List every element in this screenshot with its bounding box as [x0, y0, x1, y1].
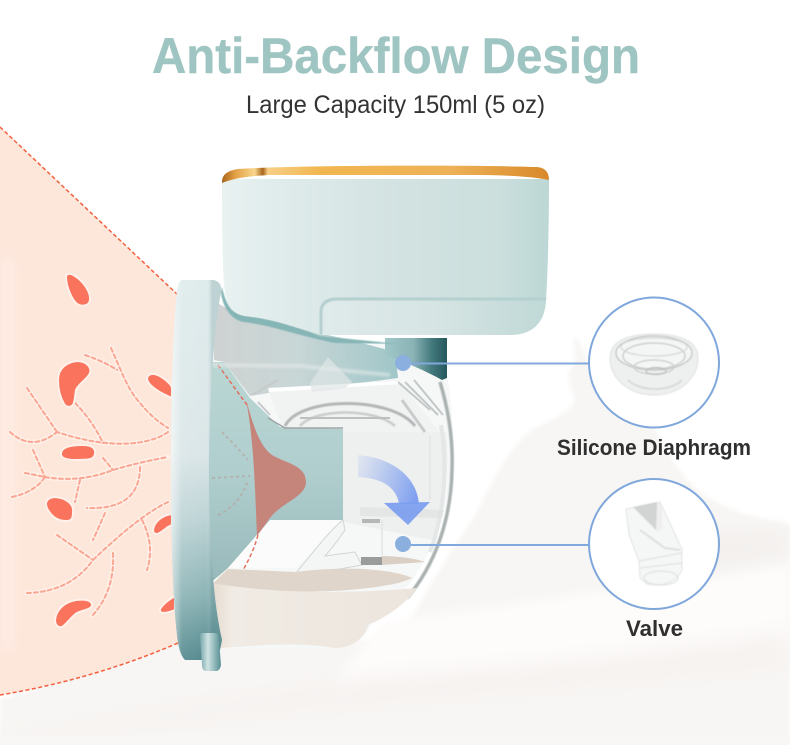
- circle frame: [589, 298, 719, 428]
- milk lobes: [46, 274, 175, 627]
- clear valve seat detail: [212, 357, 443, 432]
- marker dot: [395, 536, 411, 552]
- flange tab: [200, 633, 221, 671]
- breast shape: [0, 127, 178, 695]
- teal shadow under container: [221, 287, 400, 344]
- callout: valve: [395, 479, 719, 641]
- cup shell right edge: [407, 382, 452, 598]
- container body: [222, 179, 549, 335]
- teal interior panel: [208, 362, 343, 585]
- neck connector: [385, 338, 447, 380]
- flange ring: [171, 280, 222, 660]
- label: Valve: Valve: [626, 616, 683, 641]
- breast dashed outline: [0, 127, 178, 695]
- circle frame: [589, 479, 719, 609]
- backflow arrow: [358, 455, 430, 525]
- upper clear section: [214, 300, 398, 396]
- white inner chamber: [343, 432, 447, 540]
- background: milk splash and waves: [0, 335, 790, 745]
- leader line: [403, 544, 589, 546]
- milk surface band: [212, 569, 412, 592]
- ducts seen through cup: [212, 432, 250, 515]
- marker dot: [395, 355, 411, 371]
- container lower step: [321, 299, 546, 335]
- subtitle: Large Capacity 150ml (5 oz): [246, 91, 545, 119]
- clear cup body: [212, 345, 453, 648]
- title: Anti-Backflow Design: [152, 28, 640, 84]
- milk ducts: [10, 348, 168, 615]
- dashed breast line seen through cup: [218, 365, 258, 608]
- nipple shape: [246, 400, 306, 536]
- icon: valve: [626, 502, 682, 585]
- milk body: [212, 583, 417, 648]
- callout: silicone diaphragm: [395, 298, 751, 460]
- breast illustration: [0, 127, 178, 695]
- breast pump: [171, 166, 549, 671]
- valve seen through cup: [295, 436, 444, 576]
- label: Silicone Diaphragm: Silicone Diaphragm: [557, 435, 751, 460]
- icon: silicone diaphragm: [610, 334, 698, 395]
- gold rim: [222, 166, 549, 183]
- lower white wedge: [228, 520, 343, 568]
- leader line: [403, 362, 589, 364]
